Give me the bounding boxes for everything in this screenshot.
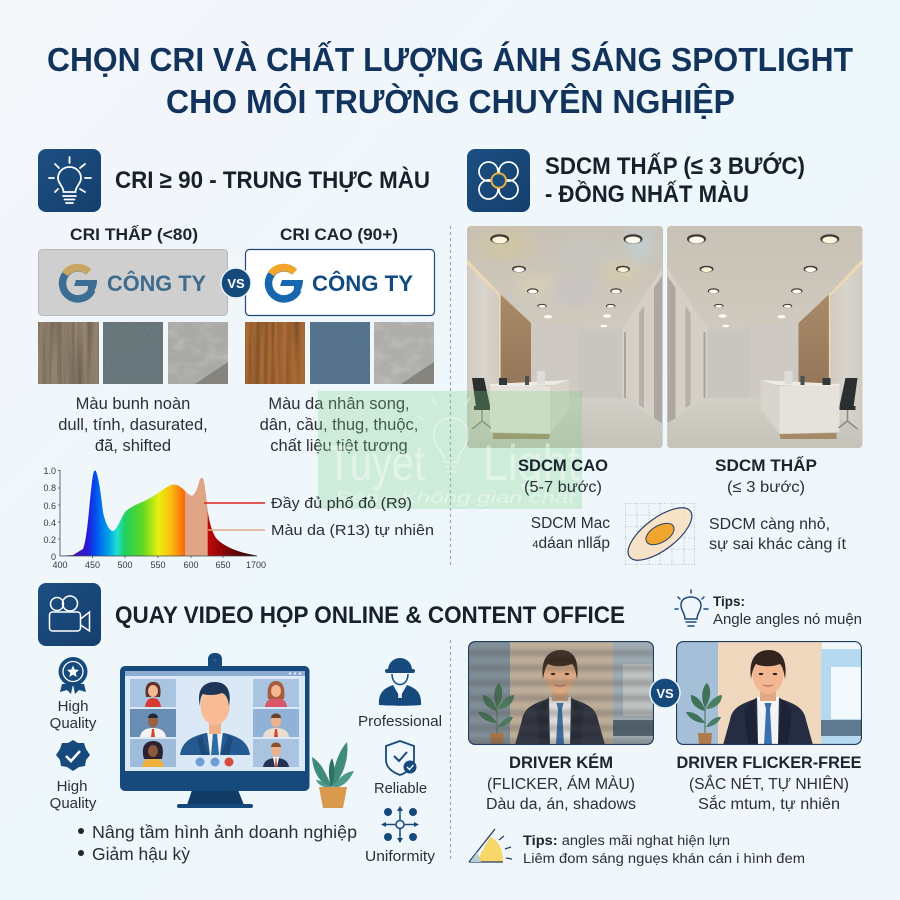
logo card: high CRI [246,250,434,316]
heading: SDCM: SDCM THẤP (≤ 3 BƯỚC) [545,152,805,180]
icon: light bulb [38,149,101,212]
text: flicker-free driver: (SẮC NÉT, TỰ NHIÊN) [689,774,849,793]
icon: reliable shield [386,741,416,775]
swatches: high CRI [245,322,434,384]
badge: VS [221,268,251,298]
list: benefits [78,822,357,864]
label: high quality 1: High [58,698,88,715]
list: benefits: Giảm hậu kỳ [92,844,190,864]
label: uniformity: Uniformity [365,848,436,865]
label: reliable: Reliable [374,780,427,797]
icon: colour uniformity [467,149,530,212]
text: low CRI caption [58,395,208,455]
logo card: high CRI: CÔNG TY [312,271,413,296]
heading: CRI: CRI ≥ 90 - TRUNG THỰC MÀU [115,166,430,194]
text: SDCM note right: sự sai khác càng ít [709,536,847,553]
icon: professional worker [379,658,421,706]
tips bottom [469,829,805,866]
title: CHO MÔI TRƯỜNG CHUYÊN NGHIỆP [166,82,735,120]
text: high CRI caption: dân, cầu, thug, thuộc, [260,416,418,434]
heading: video: QUAY VIDEO HỌP ONLINE & CONTENT OFFICE [115,602,625,629]
main presenter [180,733,250,755]
logo card: low CRI: CÔNG TY [107,271,206,296]
label: low SDCM [715,456,817,496]
chart: light spectrum: 450 [85,560,100,570]
label: high SDCM [518,457,608,496]
photo: high SDCM office [467,226,663,448]
illustration: monitor [120,653,310,808]
diagram: MacAdam ellipse [620,498,700,570]
watermark: Light [483,435,580,491]
icon: video camera [38,583,101,646]
text: high CRI caption: Màu da nhân song, [268,395,410,413]
watermark: Tuyet [327,435,425,491]
callout: R13: Màu da (R13) tự nhiên [271,522,434,539]
icon: check badge [56,740,90,771]
text: poor driver: DRIVER KÉM [509,753,613,772]
title: CHỌN CRI VÀ CHẤT LƯỢNG ÁNH SÁNG SPOTLIGHT [47,41,853,78]
label: high quality 1: Quality [50,715,97,732]
chart: light spectrum: 0.6 [43,501,56,511]
illustration: potted plant [312,742,354,808]
icon: rosette [58,657,88,694]
watermark: Đèn - Không gian chất [335,488,577,507]
text: SDCM note right [709,516,847,553]
text: flicker-free driver: DRIVER FLICKER-FREE [676,754,862,772]
text: low CRI caption: dull, tính, dasurated, [58,416,208,434]
chart: light spectrum: 0 [51,552,56,562]
tips bottom: Liêm đom sáng nguẹs khán cán i hình đem [523,851,805,866]
text: SDCM note right: SDCM càng nhỏ, [709,516,830,533]
chart: light spectrum: 600 [183,560,199,570]
text: SDCM note left: 4dáan nllấp [532,535,610,552]
text: low CRI caption: Màu bunh noàn [76,395,190,413]
icon: tip bulb [675,590,708,626]
tips top [675,590,862,628]
badge: VS driver: VS [656,686,674,701]
chart: light spectrum [43,465,266,570]
chart: light spectrum: 0.4 [43,518,56,528]
photo: low SDCM office [666,226,862,448]
label: high SDCM: SDCM CAO [518,457,608,475]
label: low SDCM: (≤ 3 bước) [727,479,805,496]
text: SDCM note left [531,515,610,552]
icon: uniformity network [381,806,419,843]
icon: beam angle [469,829,512,862]
label: high quality 1 [50,698,97,732]
tiles [130,679,176,707]
text: flicker-free driver: Sắc mtum, tự nhiên [698,796,840,813]
heading: SDCM: - ĐỒNG NHẤT MÀU [545,180,749,208]
chart: light spectrum: 1700 [246,560,266,570]
text: flicker-free driver [676,754,862,813]
tips top: Tips: [713,594,745,609]
badge: VS driver [650,678,680,708]
label: high quality 2: High [57,778,87,795]
text: low CRI caption: đã, shifted [95,437,171,455]
chart: light spectrum: 550 [150,560,166,570]
photo: flicker driver [468,641,654,745]
heading: SDCM [545,152,805,208]
text: SDCM note left: SDCM Mac [531,515,610,532]
label: CRI high: CRI CAO (90+) [280,225,398,244]
watermark [318,391,582,509]
label: low SDCM: SDCM THẤP [715,456,817,475]
text: poor driver: Dàu da, án, shadows [486,796,636,813]
chart: light spectrum: 400 [52,560,68,570]
tips top: Angle angles nó muện [713,612,862,628]
text: high CRI caption: chất liệu tiệt tương [270,437,408,455]
list: benefits: Nâng tầm hình ảnh doanh nghiệp [92,822,357,842]
chart: light spectrum: 500 [117,560,133,570]
tips bottom: Tips: angles mãi nghat hiện lựn [523,833,730,848]
label: high SDCM: (5-7 bước) [524,479,602,496]
swatches: low CRI [38,322,228,384]
callout: R9: Đầy đủ phổ đỏ (R9) [271,495,412,512]
badge: VS: VS [227,276,245,291]
label: high quality 2 [50,778,97,812]
logo card: low CRI [38,250,228,316]
label: professional: Professional [358,713,442,730]
chart: light spectrum: 650 [215,560,231,570]
title [47,41,853,120]
label: high quality 2: Quality [50,795,97,812]
text: high CRI caption [260,395,418,455]
text: poor driver [486,753,636,813]
chart: light spectrum: 0.8 [43,483,56,493]
chart: light spectrum: 0.2 [43,535,56,545]
text: poor driver: (FLICKER, ÁM MÀU) [487,774,635,793]
chart: light spectrum: 1.0 [43,466,56,476]
photo: flicker-free driver [676,641,862,745]
label: CRI low: CRI THẤP (<80) [70,225,198,244]
